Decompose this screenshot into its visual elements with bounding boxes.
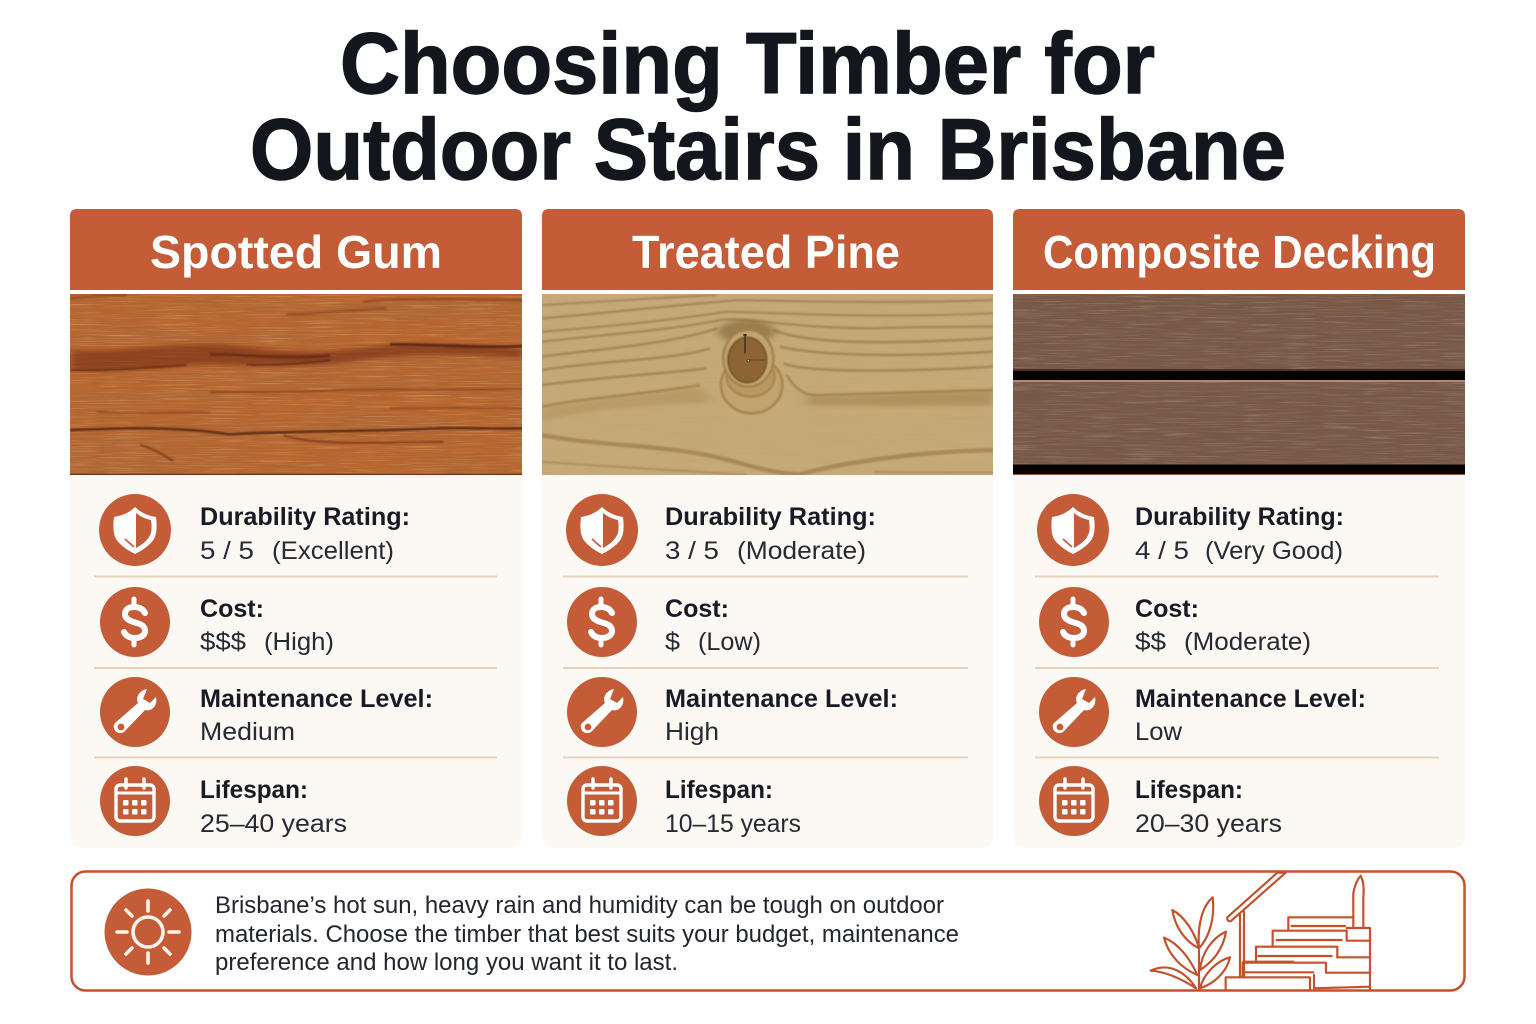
durability row: Durability Rating:: [1135, 503, 1344, 531]
climate advice text: preference and how long you want it to last.: [215, 949, 678, 976]
cost row: $$: [1135, 628, 1166, 656]
lifespan row: 25–40 years: [200, 810, 347, 838]
lifespan row: [100, 766, 347, 838]
icon: wrench: [1039, 677, 1109, 747]
plant: [1151, 897, 1230, 989]
photo: treated pine timber with knot: [542, 294, 993, 475]
cost row: (High): [264, 628, 334, 656]
cost row: $: [665, 628, 680, 656]
icon: sun: [104, 888, 192, 976]
lifespan row: 20–30 years: [1135, 810, 1282, 838]
lifespan row: 10–15 years: [665, 810, 801, 838]
durability row: (Moderate): [737, 537, 866, 565]
cost row: Cost:: [665, 595, 729, 623]
durability row: 4 / 5: [1135, 537, 1189, 565]
cost row: (Moderate): [1184, 628, 1311, 656]
lifespan row: Lifespan:: [665, 776, 773, 804]
icon: calendar: [1039, 766, 1109, 836]
maintenance row: Maintenance Level:: [1135, 685, 1366, 713]
icon: dollar: [1039, 587, 1109, 657]
panel: Composite Decking: [1013, 209, 1465, 848]
maintenance row: Maintenance Level:: [665, 685, 898, 713]
card header: Spotted Gum: Spotted Gum: [150, 226, 442, 278]
icon: shield: [99, 494, 171, 566]
climate advice text: materials. Choose the timber that best suits your budget, maintenance: [215, 921, 959, 948]
durability row: (Excellent): [272, 537, 394, 565]
card header: Treated Pine: [542, 209, 993, 290]
card header: Treated Pine: Treated Pine: [632, 226, 900, 278]
panel body: Treated Pine specs: [542, 475, 993, 848]
cost row: [567, 587, 761, 657]
icon: dollar: [567, 587, 637, 657]
illustration: plant and stairs: [1151, 873, 1370, 989]
durability row: [99, 494, 410, 566]
cost row: [100, 587, 334, 657]
photo: composite decking boards: [1013, 294, 1465, 475]
card header: Composite Decking: [1013, 209, 1465, 290]
icon: calendar: [100, 766, 170, 836]
panel body: Composite Decking specs: [1013, 475, 1465, 848]
climate advice text: [215, 892, 959, 976]
card header: Composite Decking: Composite Decking: [1043, 226, 1436, 278]
cost row: [1039, 587, 1311, 657]
maintenance row: [567, 677, 898, 747]
cost row: Cost:: [1135, 595, 1199, 623]
durability row: 3 / 5: [665, 537, 719, 565]
icon: dollar: [100, 587, 170, 657]
icon: shield: [1037, 494, 1109, 566]
title: Choosing Timber for: [340, 16, 1155, 112]
durability row: [566, 494, 876, 566]
panel: Spotted Gum: [70, 209, 523, 848]
title: Outdoor Stairs in Brisbane: [250, 102, 1286, 198]
panel body: Spotted Gum specs: [70, 475, 522, 848]
card header: Spotted Gum: [70, 209, 522, 290]
durability row: Durability Rating:: [665, 503, 876, 531]
lifespan row: [1039, 766, 1282, 838]
cost row: Cost:: [200, 595, 264, 623]
durability row: [1037, 494, 1344, 566]
durability row: 5 / 5: [200, 537, 254, 565]
callout: Brisbane climate note: [72, 872, 1464, 990]
lifespan row: [567, 766, 801, 838]
lifespan row: Lifespan:: [200, 776, 308, 804]
icon: wrench: [100, 677, 170, 747]
cost row: (Low): [698, 628, 761, 656]
durability row: Durability Rating:: [200, 503, 410, 531]
climate advice text: Brisbane’s hot sun, heavy rain and humidity can be tough on outdoor: [215, 892, 944, 919]
maintenance row: High: [665, 718, 719, 746]
durability row: (Very Good): [1205, 537, 1343, 565]
lifespan row: Lifespan:: [1135, 776, 1243, 804]
photo: spotted gum timber grain: [70, 294, 523, 476]
icon: wrench: [567, 677, 637, 747]
icon: calendar: [567, 766, 637, 836]
maintenance row: [1039, 677, 1366, 747]
panel: Treated Pine: [542, 209, 993, 848]
title: [250, 16, 1286, 198]
stairs and handrail: [1226, 873, 1370, 989]
maintenance row: Maintenance Level:: [200, 685, 433, 713]
maintenance row: [100, 677, 433, 747]
icon: shield: [566, 494, 638, 566]
cost row: $$$: [200, 628, 246, 656]
maintenance row: Low: [1135, 718, 1183, 746]
maintenance row: Medium: [200, 718, 295, 746]
